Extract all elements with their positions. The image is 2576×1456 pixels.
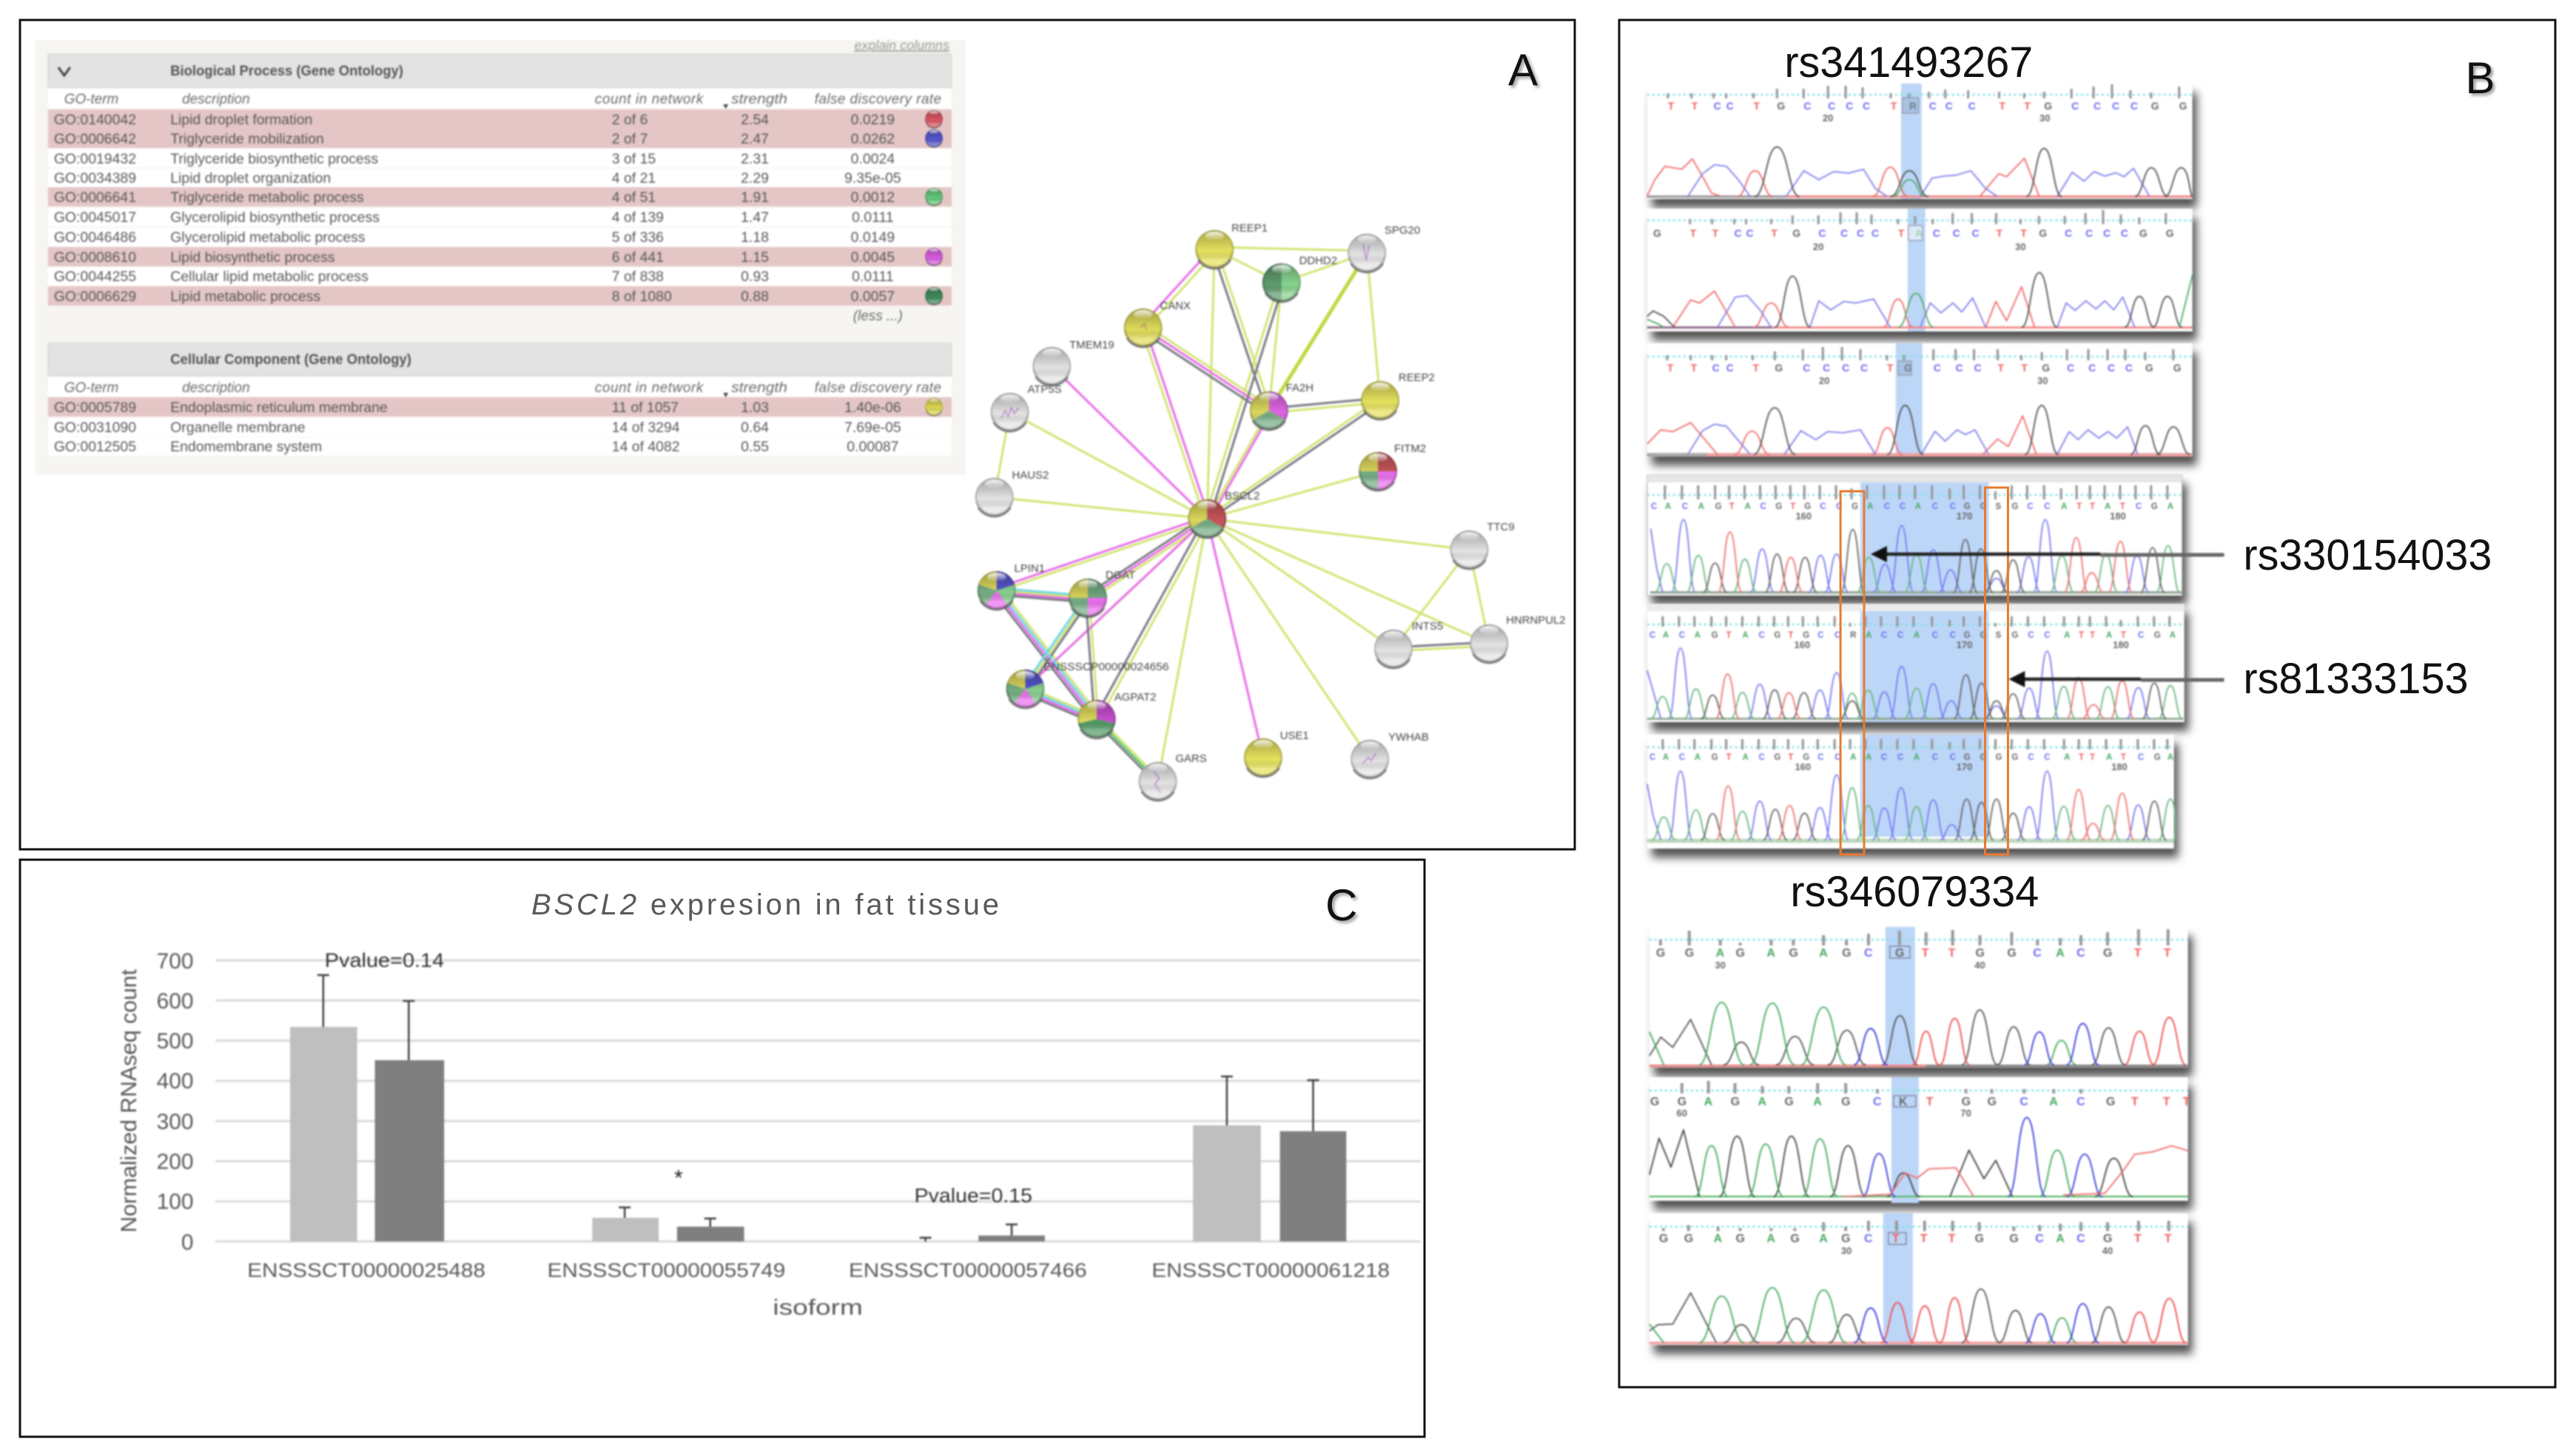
row: endomembrane system <box>48 437 952 456</box>
variant label rs346079334: rs346079334 <box>1790 869 2039 916</box>
node: FA2H <box>1250 382 1314 430</box>
node: LPIN1 <box>978 562 1045 610</box>
node: INTS5: INTS5 <box>1412 620 1443 633</box>
x-axis isoform labels <box>247 1259 1390 1281</box>
row: cellular lipid metabolic process: 7 of 838 <box>612 269 664 285</box>
row: endoplasmic reticulum membrane: 11 of 1057 <box>612 400 679 416</box>
panel letter C: C <box>1325 880 1357 930</box>
node: USE1: USE1 <box>1280 729 1309 742</box>
chromatogram 5 <box>1647 604 2185 722</box>
variant label rs341493267: rs341493267 <box>1784 39 2033 87</box>
row: lipid droplet organization <box>48 169 952 187</box>
node: YWHAB <box>1351 731 1429 778</box>
row: organelle membrane <box>48 418 952 437</box>
row: triglyceride biosynthetic process: 2.31 <box>741 151 769 167</box>
row: lipid droplet formation: 0.0219 <box>851 112 895 128</box>
row: glycerolipid metabolic process: Glycerolipid metabolic process <box>170 229 366 246</box>
row: triglyceride metabolic process: 4 of 51 <box>612 189 656 206</box>
chromatogram 8: heterozygous K <box>1649 1077 2190 1203</box>
chromatogram 7: homozygous G: 30 <box>1715 960 1726 971</box>
label rs330154033: rs330154033 <box>2243 532 2492 579</box>
node: FITM2 <box>1359 442 1426 491</box>
node: HAUS2 <box>975 469 1049 516</box>
node: DGAT <box>1069 569 1135 617</box>
panel letter B: B <box>2465 53 2495 103</box>
variant group rs330154033 and rs81333153 chromatograms <box>1647 475 2185 849</box>
node: AGPAT2: AGPAT2 <box>1114 691 1157 704</box>
node: HAUS2: HAUS2 <box>1012 469 1049 482</box>
row: triglyceride biosynthetic process <box>48 149 952 167</box>
row: lipid droplet formation: 2 of 6 <box>612 112 648 128</box>
chromatogram 6 <box>1647 735 2176 849</box>
row: lipid droplet formation: 2.54 <box>741 112 769 128</box>
row: lipid biosynthetic process: 6 of 441 <box>612 249 664 266</box>
row: triglyceride mobilization: Triglyceride mobilization <box>170 131 324 147</box>
node: CANX <box>1124 300 1191 347</box>
node: HNRNPUL2: HNRNPUL2 <box>1506 614 1566 627</box>
row: organelle membrane: 0.64 <box>741 419 769 436</box>
y-axis tick labels: 400 <box>157 1069 194 1093</box>
chromatogram 3: homozygous G: 20 <box>1819 375 1829 386</box>
row: cellular lipid metabolic process: 0.0111 <box>852 269 894 285</box>
chromatogram 6: 170 <box>1957 761 1972 772</box>
chromatogram 2: homozygous A: 30 <box>2015 241 2026 252</box>
node: TMEM19 <box>1032 339 1114 385</box>
node: BSCL2 <box>1188 490 1260 538</box>
chromatogram 9: homozygous T: 30 <box>1841 1245 1852 1256</box>
chromatogram 9: homozygous T <box>1649 1213 2188 1345</box>
chromatogram 5: 160 <box>1794 639 1810 650</box>
node: TTC9: TTC9 <box>1487 521 1515 533</box>
chromatogram 6: C A C A G T A C G T G CC AA CC A CC GGGG CC A TT A T C G A <box>1649 753 2173 762</box>
node: GARS: GARS <box>1175 752 1207 765</box>
column header row <box>48 377 952 397</box>
node: GARS <box>1139 752 1207 801</box>
row: endoplasmic reticulum membrane: 1.03 <box>741 400 769 416</box>
arrow to rs81333153 <box>2008 671 2224 687</box>
row: triglyceride metabolic process: GO:0006641 <box>54 189 136 206</box>
row: triglyceride biosynthetic process: GO:0019432 <box>54 151 136 167</box>
node: AGPAT2 <box>1077 691 1157 738</box>
row: glycerolipid metabolic process: GO:0046486 <box>54 229 136 246</box>
chromatogram 4: 180 <box>2110 510 2126 522</box>
chromatogram 7: homozygous G: GG A G A G A G C G TT GG C A C G TT <box>1656 947 2171 960</box>
chromatogram 7: homozygous G: 40 <box>1974 960 1985 971</box>
chromatogram 4 <box>1647 475 2182 596</box>
orange highlight box rs330154033 <box>1840 491 1864 855</box>
cellular component table <box>48 343 952 456</box>
chromatogram 6: 160 <box>1795 761 1811 772</box>
column header row <box>48 89 952 109</box>
row: endoplasmic reticulum membrane: 1.40e-06 <box>844 400 901 416</box>
chromatogram 1: heterozygous R: 30 <box>2039 112 2050 124</box>
row: lipid metabolic process: 8 of 1080 <box>612 289 672 305</box>
x-axis isoform labels: ENSSSCT00000061218 <box>1151 1259 1390 1281</box>
row: endomembrane system: 14 of 4082 <box>612 439 680 455</box>
chromatogram 1: heterozygous R: 20 <box>1823 112 1833 124</box>
column header row: false discovery rate <box>815 380 941 396</box>
row: triglyceride biosynthetic process: Triglyceride biosynthetic process <box>170 151 378 167</box>
row: triglyceride mobilization: GO:0006642 <box>54 131 136 147</box>
chromatogram 9: homozygous T: GG A G A G A G C TTT GG C A C G TT <box>1659 1233 2172 1245</box>
panel A: gene ontology table and network <box>20 20 1575 849</box>
node: ENSSSCP00000024656 <box>1006 661 1168 708</box>
node: USE1 <box>1244 729 1309 777</box>
row: triglyceride mobilization <box>48 129 952 148</box>
node: LPIN1: LPIN1 <box>1015 562 1045 575</box>
row: endomembrane system: 0.00087 <box>847 439 898 455</box>
row: glycerolipid biosynthetic process: Glycerolipid biosynthetic process <box>170 209 380 226</box>
chromatogram 1: heterozygous R: TT CC T G CCCC T R CCC TT G CCCC GG <box>1668 100 2187 112</box>
row: endomembrane system: Endomembrane system <box>170 439 322 455</box>
row: lipid droplet organization: 4 of 21 <box>612 170 656 186</box>
chromatogram 8: heterozygous K: 60 <box>1677 1108 1687 1119</box>
explain columns link: explain columns <box>854 38 949 53</box>
row: endomembrane system: GO:0012505 <box>54 439 136 455</box>
column header row: description <box>182 92 250 107</box>
chromatogram 3: homozygous G: TT CC T G CCCC T G CCC TT G CCCC GG <box>1667 362 2182 374</box>
node: DGAT: DGAT <box>1106 569 1135 582</box>
chromatogram 4: 170 <box>1957 510 1972 522</box>
y-axis tick labels: 500 <box>157 1029 194 1054</box>
row: lipid biosynthetic process: Lipid biosynthetic process <box>170 249 335 266</box>
chromatogram 5: C A C A G T A C G T G CC R A CC A CC GGSG CC A TT A T C G A <box>1649 631 2176 640</box>
chromatogram 1: heterozygous R <box>1647 84 2193 199</box>
chromatogram 8: heterozygous K: GG A G A G A G C K T GG C A C G TTT <box>1650 1096 2190 1108</box>
row: lipid metabolic process: 0.88 <box>741 289 769 305</box>
row: endomembrane system: 0.55 <box>741 439 769 455</box>
row: triglyceride biosynthetic process: 0.0024 <box>851 151 895 167</box>
node: ENSSSCP00000024656: ENSSSCP00000024656 <box>1043 661 1168 673</box>
network edges <box>993 247 1489 783</box>
column header row: strength <box>731 92 787 107</box>
node: SPG20 <box>1348 224 1420 272</box>
column header row: count in network <box>595 380 704 396</box>
row: glycerolipid biosynthetic process: 0.0111 <box>852 209 894 226</box>
node: REEP1: REEP1 <box>1231 222 1268 235</box>
y-axis tick labels: 700 <box>157 949 194 974</box>
row: triglyceride mobilization: 0.0262 <box>851 131 895 147</box>
chromatogram 2: homozygous A <box>1647 209 2193 331</box>
node: TTC9 <box>1450 521 1515 569</box>
chromatogram 9: homozygous T: 40 <box>2102 1245 2113 1256</box>
y-axis title: Normalized RNAseq count <box>117 968 141 1233</box>
less link: (less ...) <box>853 309 903 324</box>
row: lipid droplet formation: GO:0140042 <box>54 112 136 128</box>
column header row: false discovery rate <box>815 92 941 107</box>
chromatogram 8: heterozygous K: 70 <box>1960 1108 1971 1119</box>
y-axis tick labels: 600 <box>157 989 194 1014</box>
chromatogram 4: C A C A G T A C G T G CC G A CC A CC GGSG CC A TT A T C G A <box>1651 502 2173 511</box>
row: cellular lipid metabolic process: Cellular lipid metabolic process <box>170 269 369 285</box>
row: glycerolipid metabolic process <box>48 228 952 246</box>
gridlines <box>215 960 1421 1241</box>
row: triglyceride mobilization: 2.47 <box>741 131 769 147</box>
node: REEP1 <box>1195 222 1268 269</box>
row: lipid droplet formation: Lipid droplet formation <box>170 112 312 128</box>
node: DDHD2: DDHD2 <box>1299 255 1337 267</box>
chromatogram 2: homozygous A: G TT CC T G CCCC T A CCC TT G CCCC GG <box>1653 227 2174 239</box>
row: lipid droplet organization: GO:0034389 <box>54 170 136 186</box>
row: organelle membrane: Organelle membrane <box>170 419 306 436</box>
protein interaction network <box>975 222 1566 801</box>
node: ATP5S <box>991 383 1062 431</box>
node: YWHAB: YWHAB <box>1388 731 1429 744</box>
annotation: significance star: * <box>674 1166 683 1190</box>
node: SPG20: SPG20 <box>1385 224 1420 237</box>
node: REEP2 <box>1361 371 1435 419</box>
panel C: BSCL2 expression bar chart <box>20 860 1425 1437</box>
node: BSCL2: BSCL2 <box>1225 490 1260 502</box>
biological process table <box>48 54 952 324</box>
row: triglyceride metabolic process: Triglyceride metabolic process <box>170 189 364 206</box>
panel letter A: A <box>1508 45 1538 95</box>
column header row: count in network <box>595 92 704 107</box>
y-axis tick labels <box>157 949 194 1255</box>
node: DDHD2 <box>1262 255 1337 302</box>
bars: ENSSSCT00000061218 <box>1193 1076 1346 1241</box>
panel B: sequencing chromatograms <box>1619 20 2555 1387</box>
row: lipid droplet organization: Lipid droplet organization <box>170 170 331 186</box>
chromatogram 5: 180 <box>2113 639 2129 650</box>
chromatogram 2: homozygous A: 20 <box>1813 241 1823 252</box>
row: lipid biosynthetic process: 1.15 <box>741 249 769 266</box>
row: endoplasmic reticulum membrane: GO:0005789 <box>54 400 136 416</box>
label rs81333153: rs81333153 <box>2243 655 2468 703</box>
row: organelle membrane: 7.69e-05 <box>844 419 901 436</box>
variant group rs346079334 chromatograms <box>1649 927 2190 1345</box>
row: organelle membrane: 14 of 3294 <box>612 419 680 436</box>
node: FITM2: FITM2 <box>1394 442 1426 455</box>
node: ATP5S: ATP5S <box>1027 383 1062 396</box>
column header row: description <box>182 380 250 396</box>
row: cellular lipid metabolic process <box>48 267 952 286</box>
row: lipid metabolic process: Lipid metabolic process <box>170 289 320 305</box>
row: lipid droplet organization: 2.29 <box>741 170 769 186</box>
row: triglyceride metabolic process <box>48 187 952 206</box>
row: triglyceride biosynthetic process: 3 of 15 <box>612 151 656 167</box>
row: triglyceride mobilization: 2 of 7 <box>612 131 648 147</box>
node: INTS5 <box>1374 620 1443 668</box>
row: endoplasmic reticulum membrane: Endoplasmic reticulum membrane <box>170 400 388 416</box>
node: HNRNPUL2 <box>1470 614 1566 663</box>
x-axis isoform labels: ENSSSCT00000057466 <box>849 1259 1087 1281</box>
y-axis tick labels: 300 <box>157 1110 194 1134</box>
bar chart <box>117 949 1421 1320</box>
row: lipid biosynthetic process: GO:0008610 <box>54 249 136 266</box>
row: glycerolipid metabolic process: 1.18 <box>741 229 769 246</box>
x-axis isoform labels: ENSSSCT00000025488 <box>247 1259 485 1281</box>
row: lipid droplet organization: 9.35e-05 <box>844 170 901 186</box>
row: endoplasmic reticulum membrane <box>48 397 952 417</box>
row: lipid metabolic process: 0.0057 <box>851 289 895 305</box>
node: TMEM19: TMEM19 <box>1069 339 1114 351</box>
chromatogram 4: 160 <box>1795 510 1812 522</box>
row: glycerolipid biosynthetic process: GO:0045017 <box>54 209 136 226</box>
row: lipid biosynthetic process <box>48 247 952 266</box>
node: REEP2: REEP2 <box>1399 371 1435 384</box>
bars: ENSSSCT00000057466 <box>920 1224 1045 1241</box>
chart title: BSCL2 expresion in fat tissue <box>531 889 999 921</box>
node: FA2H: FA2H <box>1286 382 1314 394</box>
row: glycerolipid biosynthetic process: 1.47 <box>741 209 769 226</box>
y-axis tick labels: 100 <box>157 1190 194 1214</box>
arrow to rs330154033 <box>1871 546 2224 562</box>
row: lipid droplet formation <box>48 109 952 129</box>
y-axis tick labels: 200 <box>157 1150 194 1174</box>
row: cellular lipid metabolic process: 0.93 <box>741 269 769 285</box>
orange highlight box rs81333153 <box>1985 488 2008 855</box>
x-axis title: isoform <box>773 1295 863 1320</box>
row: lipid metabolic process: GO:0006629 <box>54 289 136 305</box>
column header row: GO-term <box>64 380 118 396</box>
annotation: Pvalue 0.15: Pvalue=0.15 <box>915 1184 1032 1207</box>
y-axis tick labels: 0 <box>181 1230 194 1255</box>
collapse chevron <box>58 67 70 75</box>
row: triglyceride metabolic process: 0.0012 <box>851 189 895 206</box>
node: CANX: CANX <box>1160 300 1191 312</box>
variant group rs341493267 chromatograms <box>1647 84 2193 456</box>
row: triglyceride metabolic process: 1.91 <box>741 189 769 206</box>
row: cellular lipid metabolic process: GO:0044255 <box>54 269 136 285</box>
row: glycerolipid metabolic process: 5 of 336 <box>612 229 664 246</box>
chromatogram 3: homozygous G <box>1647 343 2193 456</box>
annotation: Pvalue 0.14: Pvalue=0.14 <box>325 949 444 971</box>
bars: ENSSSCT00000055749 <box>592 1207 744 1241</box>
row: lipid biosynthetic process: 0.0045 <box>851 249 895 266</box>
row: lipid metabolic process <box>48 286 952 306</box>
row: glycerolipid biosynthetic process <box>48 208 952 226</box>
row: glycerolipid metabolic process: 0.0149 <box>851 229 895 246</box>
chromatogram 3: homozygous G: 30 <box>2037 375 2048 386</box>
chromatogram 5: 170 <box>1957 639 1972 650</box>
row: glycerolipid biosynthetic process: 4 of 139 <box>612 209 664 226</box>
gene ontology enrichment table <box>36 38 966 475</box>
column header row: strength <box>731 380 787 396</box>
chromatogram 7: homozygous G <box>1649 927 2188 1068</box>
biological process heading: Biological Process (Gene Ontology) <box>170 64 403 79</box>
bars: ENSSSCT00000025488 <box>290 975 444 1241</box>
chromatogram 6: 180 <box>2111 761 2128 772</box>
cellular component heading: Cellular Component (Gene Ontology) <box>170 352 411 368</box>
column header row: GO-term <box>64 92 118 107</box>
row: organelle membrane: GO:0031090 <box>54 419 136 436</box>
x-axis isoform labels: ENSSSCT00000055749 <box>548 1259 785 1281</box>
